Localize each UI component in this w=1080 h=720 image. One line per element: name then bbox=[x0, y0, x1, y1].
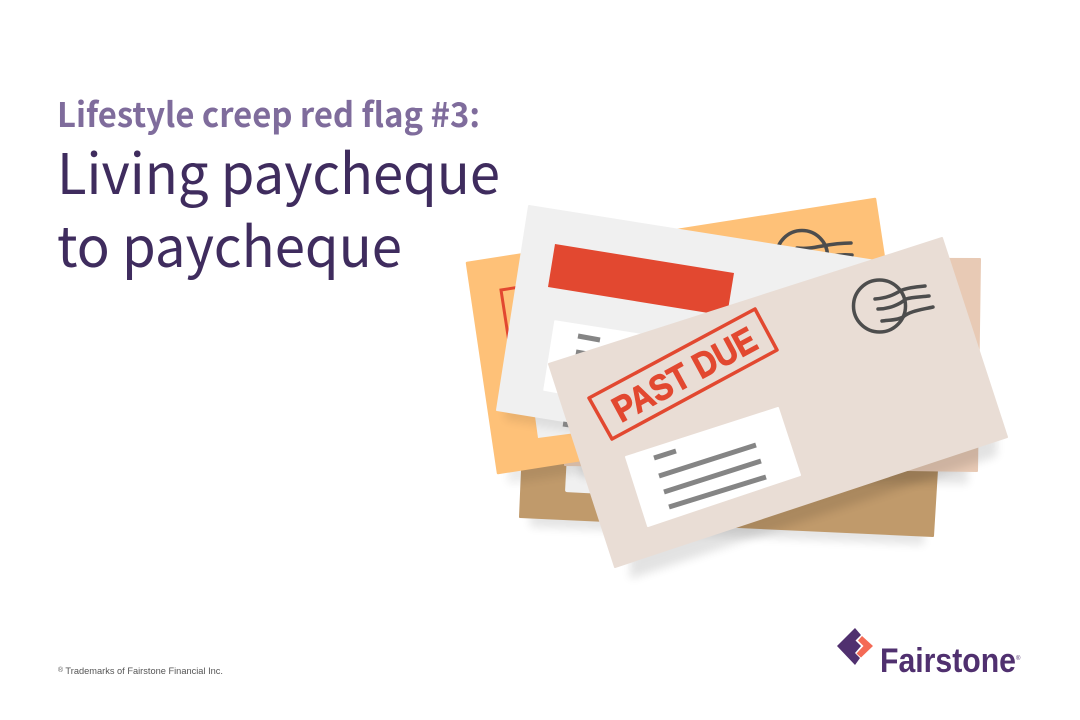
logo wordmark: Fairstone bbox=[880, 642, 1016, 680]
eyebrow heading: Lifestyle creep red flag #3: bbox=[57, 88, 480, 137]
envelope: brown bbox=[520, 400, 940, 545]
postmark bbox=[854, 280, 933, 332]
illustration: pile of envelopes bbox=[467, 199, 1007, 579]
envelope: peach bbox=[565, 258, 980, 484]
PAST DUE stamp: PAST DUE bbox=[605, 319, 764, 430]
footer trademark note: ® bbox=[58, 666, 64, 674]
Fairstone logo bbox=[837, 628, 1021, 680]
orange envelope stamp bbox=[501, 268, 648, 342]
main heading line 2: to paycheque bbox=[57, 203, 402, 284]
footer trademark note: Trademarks of Fairstone Financial Inc. bbox=[63, 666, 223, 677]
red banner bbox=[548, 244, 734, 316]
grey envelope address lines bbox=[563, 336, 640, 425]
title block bbox=[57, 88, 500, 284]
envelope: front beige bbox=[549, 238, 1007, 579]
logo mark bbox=[837, 628, 873, 665]
orange envelope postmark bbox=[776, 230, 852, 282]
address lines bbox=[654, 445, 766, 507]
grey envelope window bbox=[544, 321, 720, 420]
logo registered mark: ® bbox=[1016, 655, 1021, 662]
address window bbox=[626, 408, 800, 526]
envelope: light grey bbox=[497, 206, 907, 480]
main heading line 1: Living paycheque bbox=[57, 130, 500, 211]
orange envelope window bbox=[530, 355, 712, 438]
envelope: orange bbox=[467, 199, 907, 484]
